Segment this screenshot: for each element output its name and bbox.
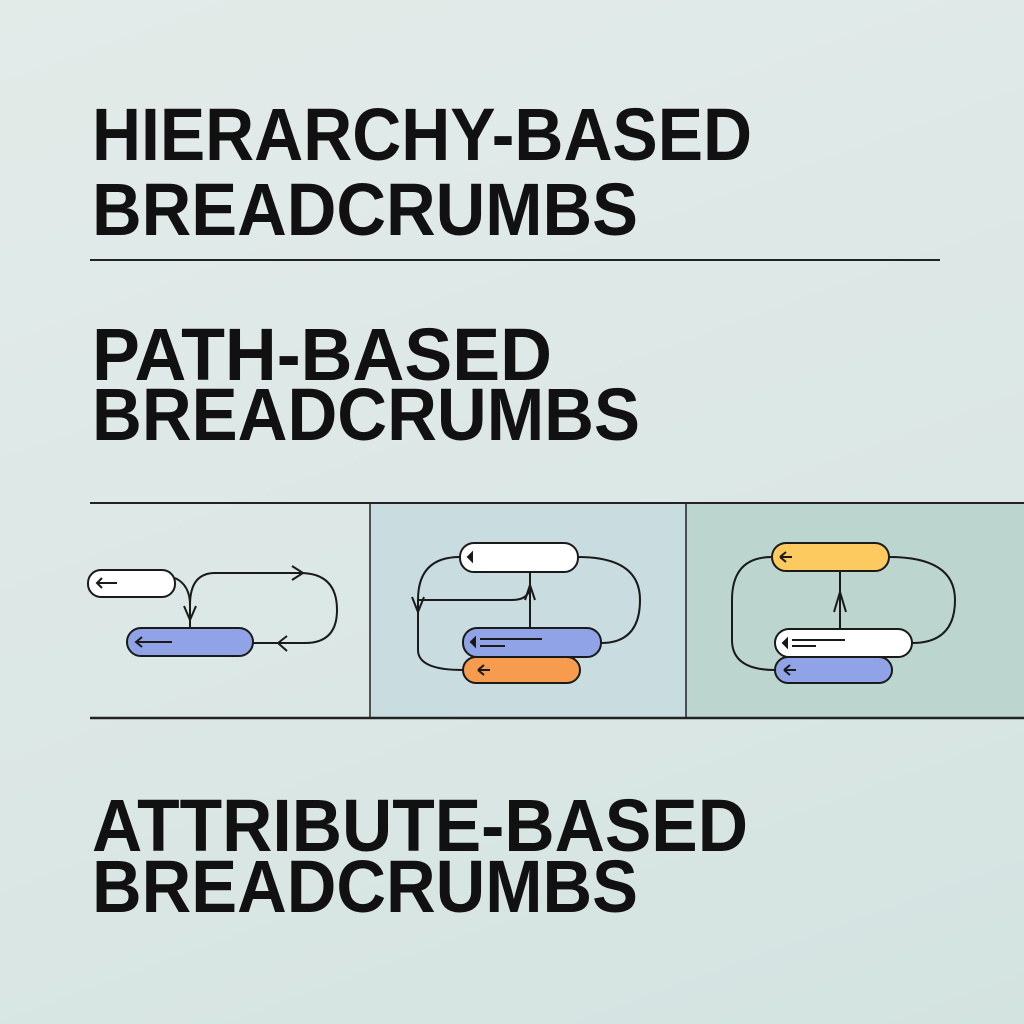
heading: attribute-based: ATTRIBUTE-BASED (92, 784, 748, 867)
heading: path-based: BREADCRUMBS (92, 373, 640, 456)
heading: attribute-based (92, 784, 748, 928)
panel 3: attribute diagram (732, 543, 955, 683)
heading: attribute-based: BREADCRUMBS (92, 845, 638, 928)
heading: path-based (92, 313, 640, 456)
heading: path-based: PATH-BASED (92, 313, 552, 396)
heading: hierarchy-based (92, 93, 752, 251)
heading: hierarchy-based: BREADCRUMBS (92, 168, 638, 251)
panel 1: hierarchy diagram (88, 566, 337, 656)
heading: hierarchy-based: HIERARCHY-BASED (92, 93, 752, 176)
panel 2: path diagram (412, 543, 640, 683)
diagram strip (88, 503, 1024, 718)
